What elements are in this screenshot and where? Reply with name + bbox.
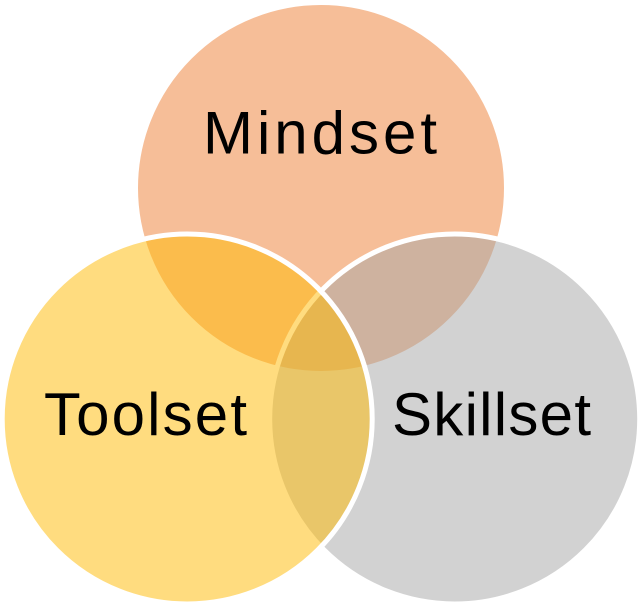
circle: Toolset (2, 234, 372, 604)
label: Mindset: Mindset (203, 100, 437, 166)
circle: Skillset (270, 234, 640, 604)
label: Toolset: Toolset (44, 381, 247, 448)
label: Skillset: Skillset (392, 381, 591, 448)
circle: Mindset (136, 2, 506, 374)
